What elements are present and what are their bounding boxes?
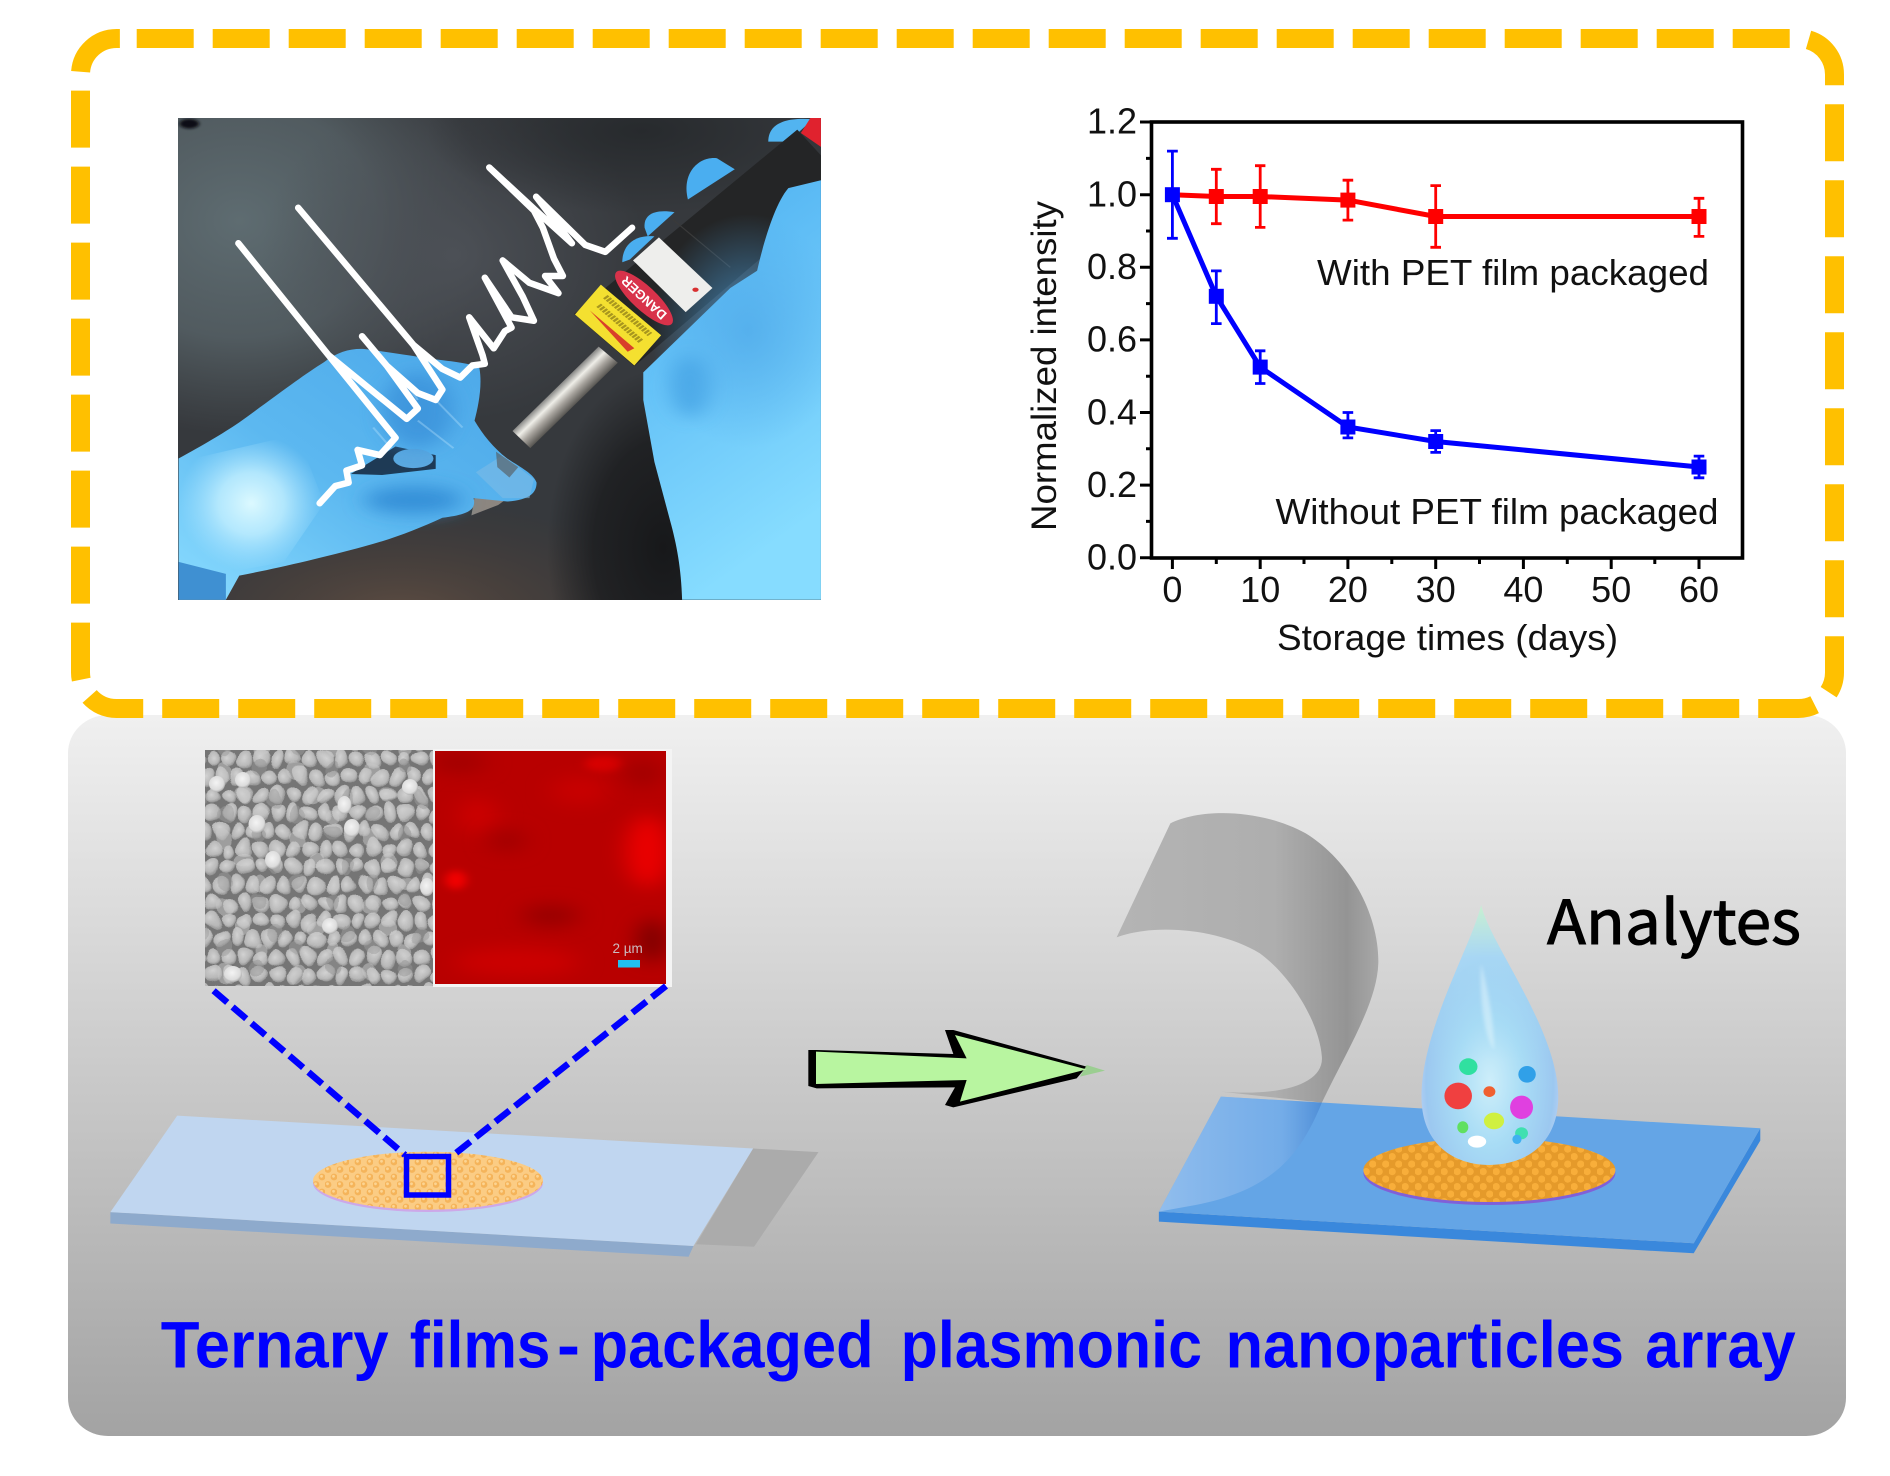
photo dark background bbox=[178, 118, 821, 600]
photo contents bbox=[178, 118, 821, 600]
x axis title: Storage times (days) bbox=[1277, 617, 1618, 658]
y tick labels: 0.4 bbox=[1087, 392, 1137, 432]
dashed yellow border panel bbox=[80, 38, 1834, 708]
white strip beside Raman map bbox=[433, 749, 672, 987]
scale bar label: 2 µm bbox=[612, 941, 643, 956]
title: films bbox=[410, 1308, 550, 1382]
blue series bbox=[1165, 151, 1706, 478]
x tick labels: 30 bbox=[1416, 569, 1456, 610]
peeled film translucent lower part bbox=[1159, 1097, 1322, 1212]
laser black body bbox=[574, 130, 821, 366]
x tick labels bbox=[1162, 569, 1719, 610]
title: plasmonic bbox=[901, 1308, 1202, 1382]
bottom grey panel bbox=[68, 715, 1846, 1436]
title: Ternary bbox=[161, 1308, 389, 1382]
y tick labels: 1.2 bbox=[1087, 100, 1137, 142]
right gloved hand bbox=[643, 180, 821, 600]
plot frame bbox=[1152, 122, 1742, 558]
x tick labels: 10 bbox=[1240, 569, 1280, 610]
x tick labels: 60 bbox=[1679, 569, 1719, 610]
analyte spheres bbox=[1459, 1058, 1477, 1075]
left gloved hand bbox=[179, 349, 537, 600]
line chart: normalized intensity vs storage time bbox=[1025, 100, 1742, 658]
title: packaged bbox=[591, 1308, 874, 1382]
y axis ticks bbox=[1140, 122, 1151, 558]
title: - bbox=[557, 1308, 580, 1382]
vial bbox=[472, 459, 508, 516]
fingertips behind laser bbox=[686, 158, 735, 200]
title: array bbox=[1645, 1308, 1796, 1382]
title bbox=[161, 1308, 1796, 1382]
left substrate: glass slide with nanoparticle array bbox=[110, 1116, 753, 1257]
danger label text: DANGER bbox=[618, 273, 670, 323]
red series bbox=[1172, 166, 1706, 247]
y tick labels: 0.0 bbox=[1087, 536, 1137, 578]
left substrate: slide shadow bbox=[696, 1149, 819, 1247]
y axis title: Normalized intensity bbox=[1025, 200, 1064, 531]
blue slide bbox=[1159, 1128, 1760, 1253]
peeled film curl bbox=[1117, 813, 1378, 1103]
x tick labels: 40 bbox=[1503, 569, 1543, 610]
Raman intensity map (red) bbox=[429, 751, 669, 984]
x tick labels: 20 bbox=[1328, 569, 1368, 610]
series label: without PET: Without PET film packaged bbox=[1276, 491, 1718, 532]
x axis ticks bbox=[1172, 558, 1699, 569]
title: nanoparticles bbox=[1226, 1308, 1624, 1382]
blue dashed zoom lines bbox=[214, 986, 666, 1157]
steel rod of laser bbox=[512, 347, 618, 448]
danger oval bbox=[615, 270, 673, 326]
right substrate: blue slide with peeled film and analyte droplet bbox=[1117, 813, 1760, 1253]
left nanoparticle ellipse bbox=[313, 1154, 543, 1212]
x tick labels: 0 bbox=[1162, 569, 1182, 610]
x tick labels: 50 bbox=[1591, 569, 1631, 610]
green process arrow bbox=[808, 1030, 1105, 1107]
y tick labels: 1.0 bbox=[1087, 174, 1137, 214]
scale bar bbox=[618, 960, 640, 968]
laser red tip bbox=[801, 118, 821, 147]
label: Analytes: Analytes bbox=[1547, 873, 1801, 962]
y tick labels: 0.2 bbox=[1087, 464, 1137, 505]
y tick labels bbox=[1087, 100, 1137, 578]
y tick labels: 0.8 bbox=[1087, 246, 1137, 287]
photo: hands holding handheld Raman laser with spectrum overlay bbox=[178, 118, 821, 600]
right nanoparticle ellipse bbox=[1363, 1141, 1615, 1205]
analyte droplet bbox=[1421, 905, 1558, 1165]
series label: with PET: With PET film packaged bbox=[1317, 252, 1709, 293]
y tick labels: 0.6 bbox=[1087, 318, 1137, 360]
blue zoom square bbox=[406, 1156, 448, 1195]
white spectrum trace bbox=[238, 167, 632, 503]
yellow warning label bbox=[575, 285, 661, 366]
white label bbox=[633, 237, 712, 312]
SEM image of nanoparticles bbox=[205, 750, 433, 986]
